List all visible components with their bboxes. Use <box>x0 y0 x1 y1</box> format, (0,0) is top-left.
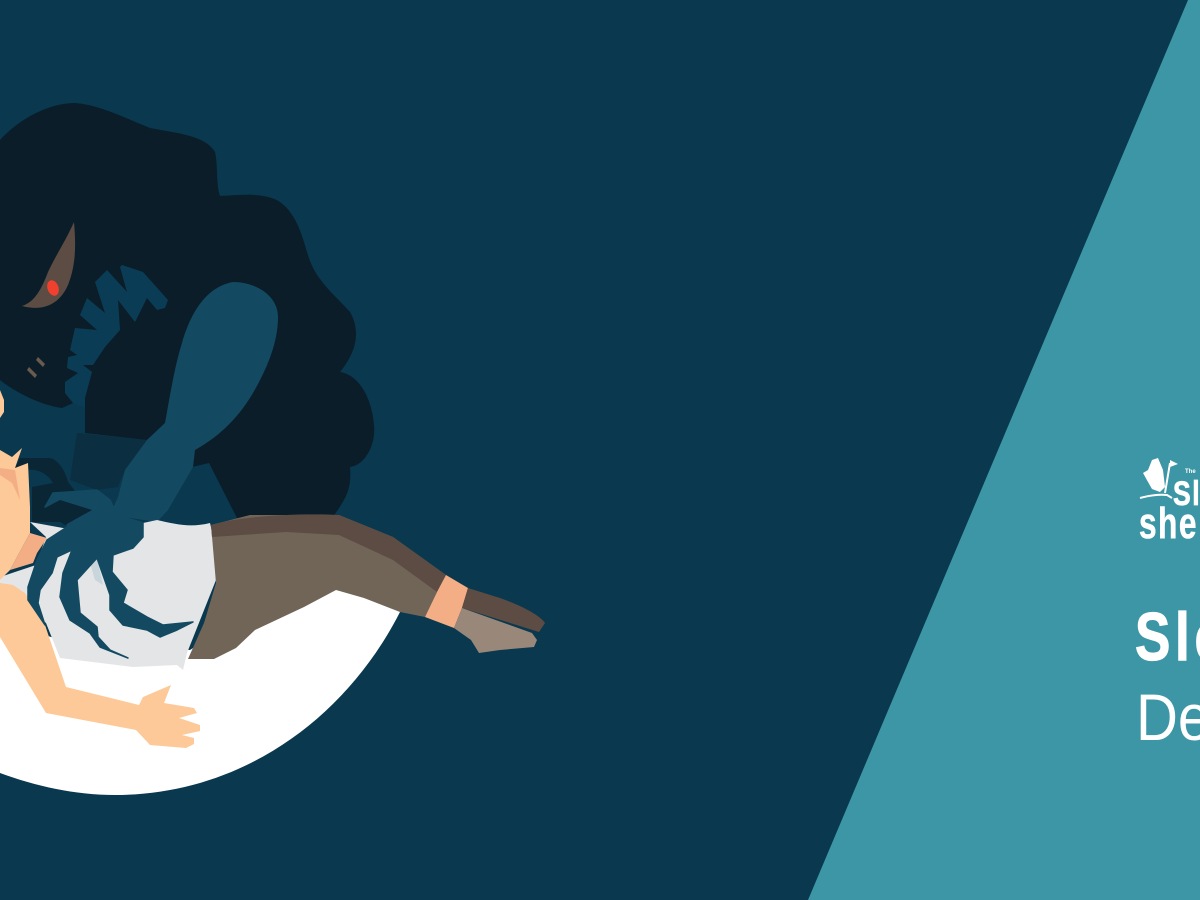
demon teeth <box>65 265 168 408</box>
logo <box>1139 458 1200 548</box>
demon nostrils <box>27 357 45 378</box>
logo word two: she <box>1139 499 1198 548</box>
pants shadow <box>211 514 446 592</box>
demon arm <box>110 282 278 522</box>
demon claw fingers <box>28 490 193 658</box>
far foot <box>462 588 545 632</box>
arm and hand <box>0 583 200 748</box>
moon <box>0 585 400 795</box>
icon: statue <box>1140 458 1178 498</box>
demon shadow arm <box>70 433 147 490</box>
face <box>0 448 30 580</box>
shirt <box>0 520 216 670</box>
claw shadow <box>45 500 92 525</box>
illustration: sleep paralysis scene <box>0 103 545 795</box>
dark claw behind <box>15 458 90 522</box>
shirt shadow <box>90 558 103 585</box>
panel: teal diagonal <box>808 0 1200 900</box>
face top <box>0 390 4 418</box>
logo small word: The <box>1185 469 1196 475</box>
ankle <box>425 575 468 628</box>
pants <box>188 515 446 659</box>
face shading <box>0 468 20 500</box>
demon body silhouette <box>0 103 374 518</box>
demon eye <box>22 222 75 308</box>
near foot <box>454 608 537 653</box>
neck shadow <box>10 533 47 570</box>
